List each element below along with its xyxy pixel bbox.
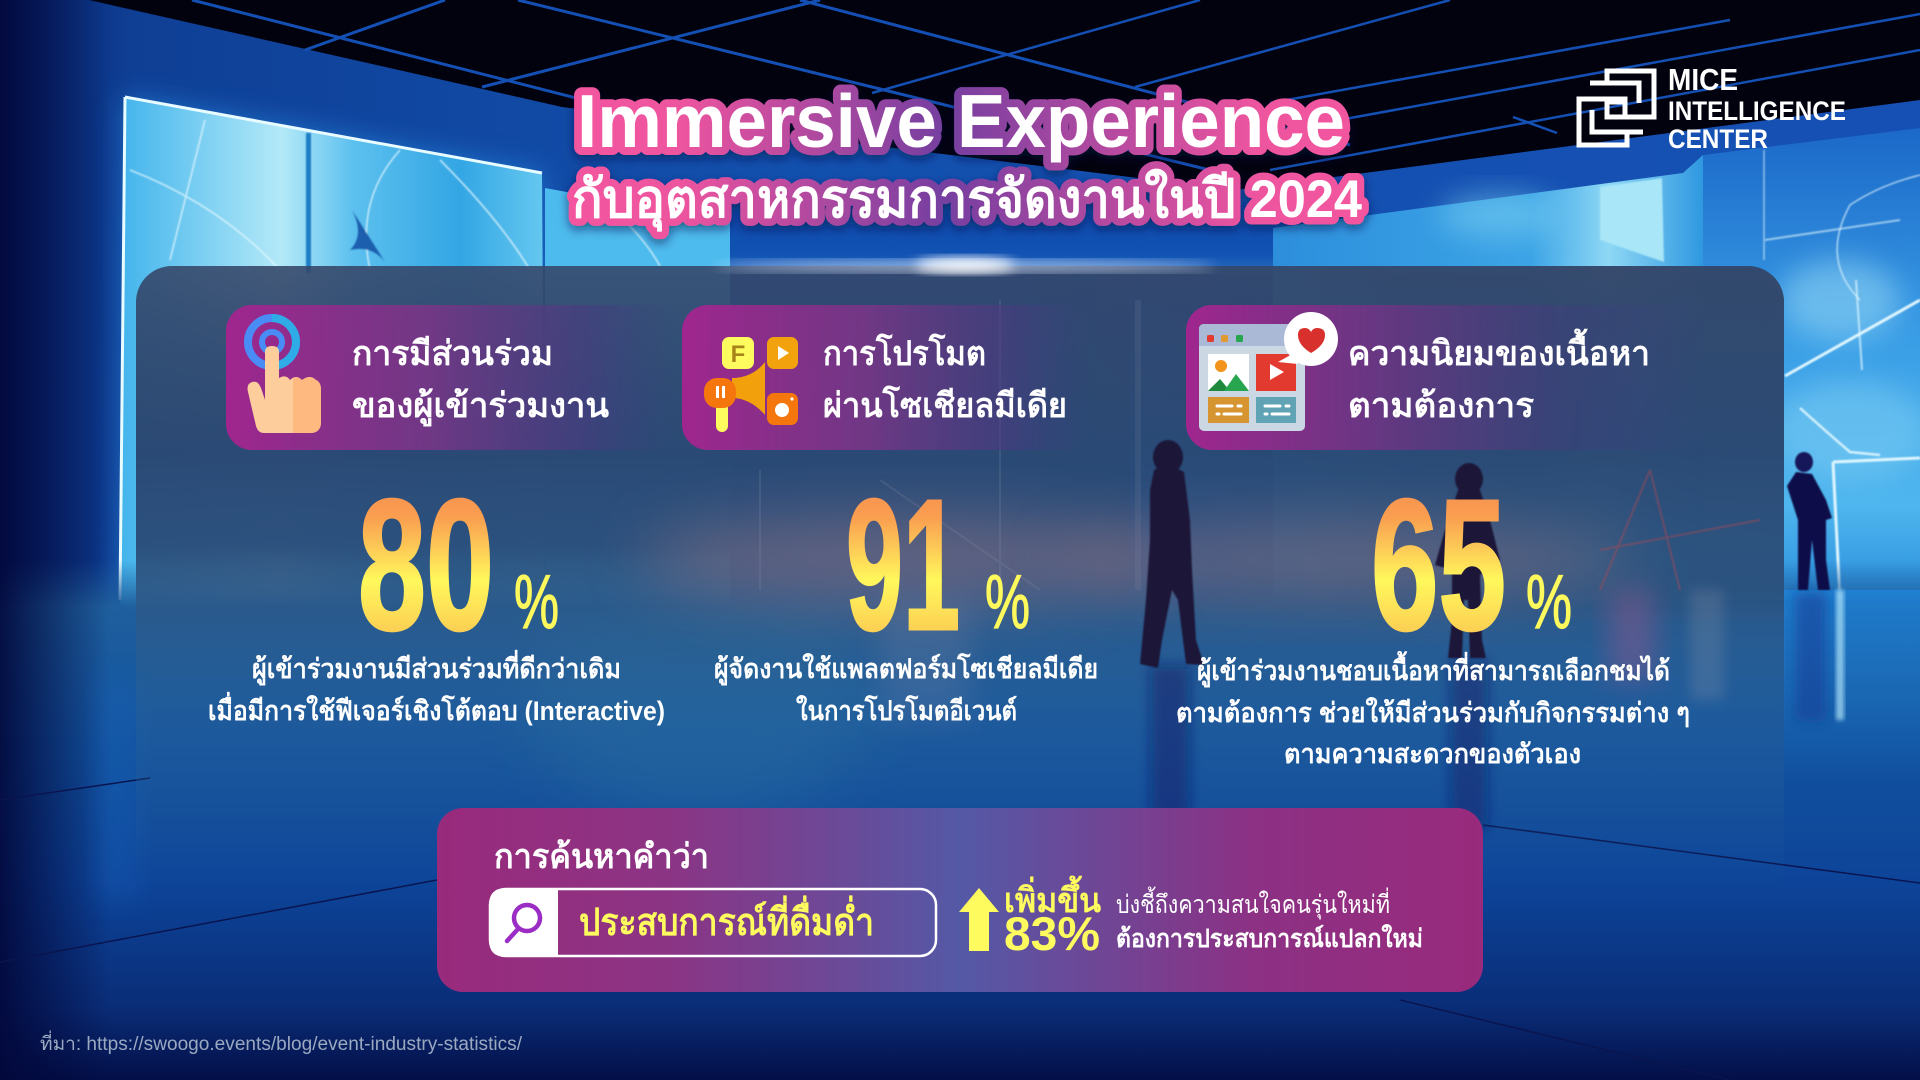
text: stat 65 description xyxy=(1176,650,1690,769)
header text: การโปรโมต xyxy=(823,333,986,373)
header text xyxy=(352,335,609,427)
logo text: MICE xyxy=(1668,62,1738,97)
icon: magnifier xyxy=(507,905,540,941)
stat: 80 percent: 80 xyxy=(358,462,494,669)
figure: silhouette left xyxy=(1140,440,1204,855)
text: stat 91 description: ผู้จัดงานใช้แพลตฟอร์มโซเชียลมีเดีย xyxy=(714,652,1098,686)
text: stat 80 description: เมื่อมีการใช้ฟีเจอร์เชิงโต้ตอบ (Interactive) xyxy=(208,691,665,726)
logo: MICE Intelligence Center xyxy=(1579,62,1846,154)
stat: 91 percent: 91 xyxy=(846,462,960,669)
search bar: ประสบการณ์ที่ดื่มด่ำ xyxy=(579,895,874,944)
panel: social media header xyxy=(682,305,1092,450)
icon: megaphone with social tiles xyxy=(704,337,798,432)
subtitle: กับอุตสาหกรรมการจัดงานในปี 2024 xyxy=(572,168,1362,232)
logo text: INTELLIGENCE xyxy=(1668,96,1846,126)
source note: ที่มา: https://swoogo.events/blog/event-industry-statistics/ xyxy=(40,1030,523,1055)
header text: ความนิยมของเนื้อหา xyxy=(1348,328,1650,373)
panel: translucent main panel xyxy=(136,266,1784,844)
header text xyxy=(1348,328,1650,425)
text: stat 91 description: ในการโปรโมตอีเวนต์ xyxy=(796,694,1017,726)
header text: ตามต้องการ xyxy=(1348,387,1535,425)
search bar xyxy=(489,888,936,957)
stat: 80 percent: % xyxy=(514,560,559,645)
explanatory text: บ่งชี้ถึงความสนใจคนรุ่นใหม่ที่ xyxy=(1116,886,1390,920)
icon: tapping hand xyxy=(248,318,321,433)
text: stat 65 description: ตามต้องการ ช่วยให้มีส่วนร่วมกับกิจกรรมต่าง ๆ xyxy=(1176,697,1690,728)
text: stat 80 description xyxy=(208,649,665,726)
logo text: CENTER xyxy=(1668,124,1768,154)
arrow: up xyxy=(959,888,999,951)
stat: 65 percent: % xyxy=(1526,560,1572,645)
header text: ของผู้เข้าร่วมงาน xyxy=(352,387,609,427)
figure: silhouette right xyxy=(1787,452,1832,722)
header text xyxy=(823,333,1067,425)
panel: participation header xyxy=(226,305,676,450)
header text: การมีส่วนร่วม xyxy=(352,335,553,373)
explanatory text xyxy=(1116,886,1423,953)
heading: การค้นหาคำว่า xyxy=(494,838,709,876)
stat: 65 percent: 65 xyxy=(1371,462,1506,669)
stat: 91 percent: % xyxy=(985,560,1030,645)
text: stat 91 description xyxy=(714,652,1098,726)
icon: content window with heart xyxy=(1199,312,1338,431)
panel: search trend callout xyxy=(437,808,1483,992)
header text: ผ่านโซเชียลมีเดีย xyxy=(823,385,1067,425)
increase label: เพิ่มขึ้น xyxy=(1004,875,1101,920)
text: stat 65 description: ตามความสะดวกของตัวเอง xyxy=(1284,739,1581,769)
logo text xyxy=(1668,62,1846,154)
increase label: 83% xyxy=(1004,907,1100,960)
increase label xyxy=(1004,875,1101,960)
text: stat 80 description: ผู้เข้าร่วมงานมีส่วนร่วมที่ดีกว่าเดิม xyxy=(252,649,621,686)
title: Immersive Experience xyxy=(577,79,1345,163)
flare: light glow on panel top edge xyxy=(715,258,1215,272)
figure: silhouette middle xyxy=(1435,463,1500,830)
explanatory text: ต้องการประสบการณ์แปลกใหม่ xyxy=(1116,923,1423,953)
icon: logo mark xyxy=(1579,71,1654,145)
icon: megaphone with social tiles: F xyxy=(731,341,745,368)
text: stat 65 description: ผู้เข้าร่วมงานชอบเนื้อหาที่สามารถเลือกชมได้ xyxy=(1197,650,1670,688)
panel: on-demand content header xyxy=(1186,305,1706,450)
